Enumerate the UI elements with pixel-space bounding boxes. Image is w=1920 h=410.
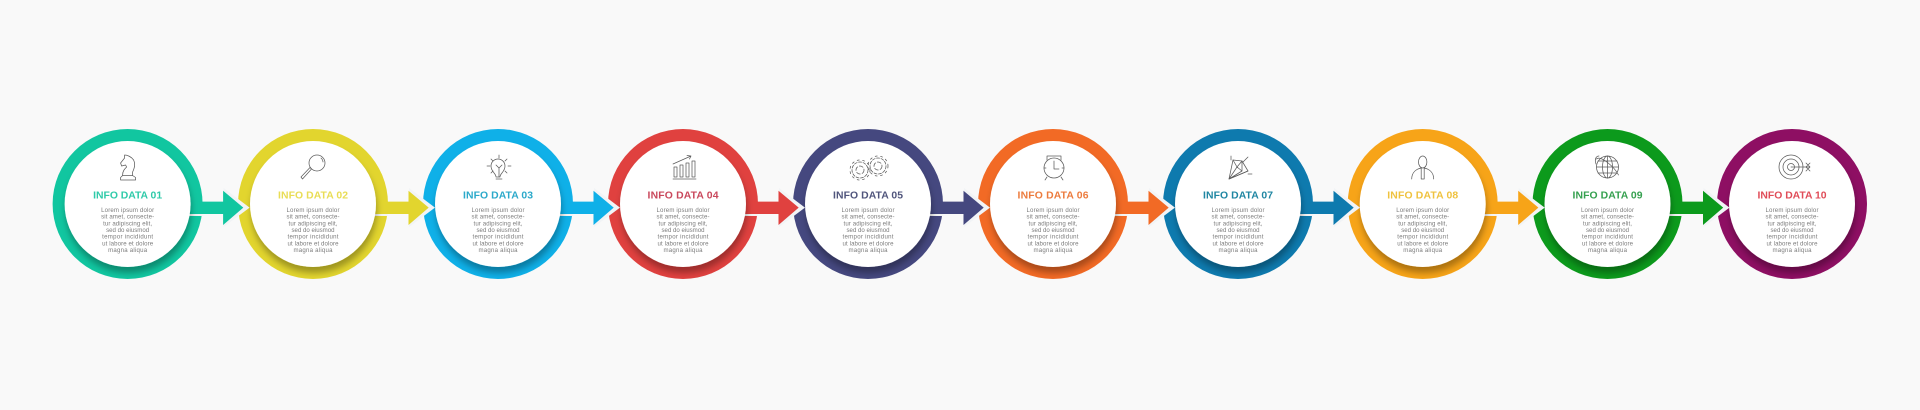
title 2: INFO DATA 02 [278,190,348,201]
body text 4: sed do eiusmod [662,227,704,234]
body text 5: sit amet, consecte- [842,214,894,221]
content circle 4 [620,141,746,267]
step 01 [53,129,250,279]
arrow 9 [1668,188,1730,227]
step 02 [238,129,435,279]
arrow 6 [1113,188,1175,227]
icon: globe [1595,156,1618,178]
body text 8: tempor incididunt [1397,234,1448,241]
title 9: INFO DATA 09 [1572,190,1643,201]
ring 3 [423,129,573,279]
body text 1: Lorem ipsum dolor [101,207,154,214]
ring 5 [793,129,943,279]
body text 4: magna aliqua [664,247,703,254]
body text 7 [1212,207,1264,254]
icon: light bulb [487,155,511,179]
body text 2: tur adipiscing elit, [288,220,338,227]
body text 1: tempor incididunt [102,234,153,241]
content circle 10 [1729,141,1855,267]
body text 8: sed do eiusmod [1401,227,1444,234]
body text 4: sit amet, consecte- [656,214,710,221]
body text 1: ut labore et dolore [102,240,154,247]
icon: person [1412,156,1434,179]
title 5: INFO DATA 05 [833,190,903,201]
body text 6: ut labore et dolore [1028,240,1079,247]
body text 3: sed do eiusmod [476,227,520,234]
ring 7 [1163,129,1313,279]
arrow 4 [743,188,805,227]
step 07 [1163,129,1360,279]
body text 5: tur adipiscing elit, [844,220,893,227]
body text 7: sit amet, consecte- [1212,214,1264,221]
body text 9: Lorem ipsum dolor [1581,207,1634,214]
ring 4 [608,129,758,279]
title 3: INFO DATA 03 [463,190,533,201]
body text 7: magna aliqua [1218,247,1258,254]
body text 5: tempor incididunt [842,234,894,241]
body text 4: Lorem ipsum dolor [656,207,710,214]
body text 5: ut labore et dolore [842,240,894,247]
body text 2: magna aliqua [294,247,333,254]
ring 2 [238,129,388,279]
arrow 3 [558,188,620,227]
body text 5: Lorem ipsum dolor [842,207,894,214]
content circle 7 [1175,141,1301,267]
title 7: INFO DATA 07 [1203,190,1273,201]
body text 6: magna aliqua [1034,247,1073,254]
content circle 6 [990,141,1116,267]
body text 7: tur adipiscing elit, [1214,220,1263,227]
body text 10: magna aliqua [1772,247,1812,254]
body text 3: tur adipiscing elit, [474,220,523,227]
body text 1: tur adipiscing elit, [103,220,152,227]
body text 6: tur adipiscing elit, [1028,220,1078,227]
step 03 [423,129,620,279]
body text 2: sed do eiusmod [292,227,334,234]
body text 5: magna aliqua [848,247,888,254]
icon: alarm clock [1044,156,1064,180]
arrow 5 [928,188,990,227]
body text 4 [656,207,710,254]
body text 7: tempor incididunt [1212,234,1264,241]
title 1: INFO DATA 01 [93,190,162,201]
body text 9 [1581,207,1634,254]
body text 9: tur adipiscing elit, [1583,220,1632,227]
body text 3: sit amet, consecte- [472,214,524,221]
content circle 2 [250,141,376,267]
title 10: INFO DATA 10 [1758,190,1827,201]
body text 2 [286,207,340,254]
arrow 7 [1298,188,1360,227]
body text 10: ut labore et dolore [1766,240,1818,247]
body text 7: sed do eiusmod [1216,227,1260,234]
title 6: INFO DATA 06 [1018,190,1089,201]
body text 9: sed do eiusmod [1586,227,1629,234]
title 4: INFO DATA 04 [648,190,719,201]
body text 1 [101,207,154,254]
body text 6: sed do eiusmod [1032,227,1074,234]
body text 8: ut labore et dolore [1397,240,1449,247]
body text 3: magna aliqua [478,247,518,254]
body text 8: Lorem ipsum dolor [1396,207,1449,214]
body text 1: sed do eiusmod [106,227,149,234]
step 09 [1532,129,1730,279]
step 05 [793,129,990,279]
arrow 2 [373,188,435,227]
ring 1 [53,129,203,279]
body text 9: tempor incididunt [1582,234,1633,241]
body text 6 [1026,207,1080,254]
content circle 1 [65,141,191,267]
body text 9: sit amet, consecte- [1581,214,1634,221]
ring 10 [1717,129,1867,279]
body text 2: tempor incididunt [288,234,339,241]
icon: bar chart [673,156,696,179]
ring 8 [1348,129,1498,279]
body text 2: ut labore et dolore [288,240,339,247]
body text 8: sit amet, consecte- [1396,214,1449,221]
body text 10: tur adipiscing elit, [1768,220,1817,227]
icon: target [1779,155,1810,179]
body text 6: tempor incididunt [1028,234,1079,241]
body text 3: Lorem ipsum dolor [472,207,524,214]
arrow 1 [188,188,250,227]
body text 9: magna aliqua [1588,247,1628,254]
title 8: INFO DATA 08 [1387,190,1458,201]
arrow 8 [1483,188,1545,227]
body text 10: Lorem ipsum dolor [1766,207,1818,214]
body text 2: sit amet, consecte- [286,214,340,221]
body text 7: Lorem ipsum dolor [1212,207,1264,214]
body text 3 [472,207,524,254]
body text 10 [1766,207,1818,254]
body text 3: ut labore et dolore [472,240,524,247]
body text 8 [1396,207,1449,254]
body text 2: Lorem ipsum dolor [286,207,340,214]
body text 4: tur adipiscing elit, [658,220,708,227]
body text 3: tempor incididunt [472,234,524,241]
icon: magnifier [301,155,325,179]
body text 10: sed do eiusmod [1770,227,1814,234]
body text 1: sit amet, consecte- [101,214,154,221]
content circle 9 [1544,141,1670,267]
content circle 5 [805,141,931,267]
icon: diamond [1229,156,1252,179]
step 04 [608,129,805,279]
content circle 3 [435,141,561,267]
step 08 [1348,129,1545,279]
step 06 [978,129,1175,279]
body text 6: sit amet, consecte- [1026,214,1080,221]
step 10 [1717,129,1867,279]
content circle 8 [1360,141,1486,267]
body text 10: tempor incididunt [1766,234,1818,241]
body text 5: sed do eiusmod [846,227,890,234]
body text 8: magna aliqua [1403,247,1443,254]
body text 4: tempor incididunt [658,234,709,241]
body text 4: ut labore et dolore [658,240,709,247]
ring 6 [978,129,1128,279]
body text 6: Lorem ipsum dolor [1026,207,1080,214]
body text 10: sit amet, consecte- [1766,214,1818,221]
icon: chess knight [121,155,136,180]
body text 7: ut labore et dolore [1212,240,1264,247]
body text 5 [842,207,894,254]
body text 8: tur adipiscing elit, [1398,220,1447,227]
body text 1: magna aliqua [108,247,148,254]
ring 9 [1532,129,1682,279]
body text 9: ut labore et dolore [1582,240,1634,247]
icon: gears [850,156,888,180]
